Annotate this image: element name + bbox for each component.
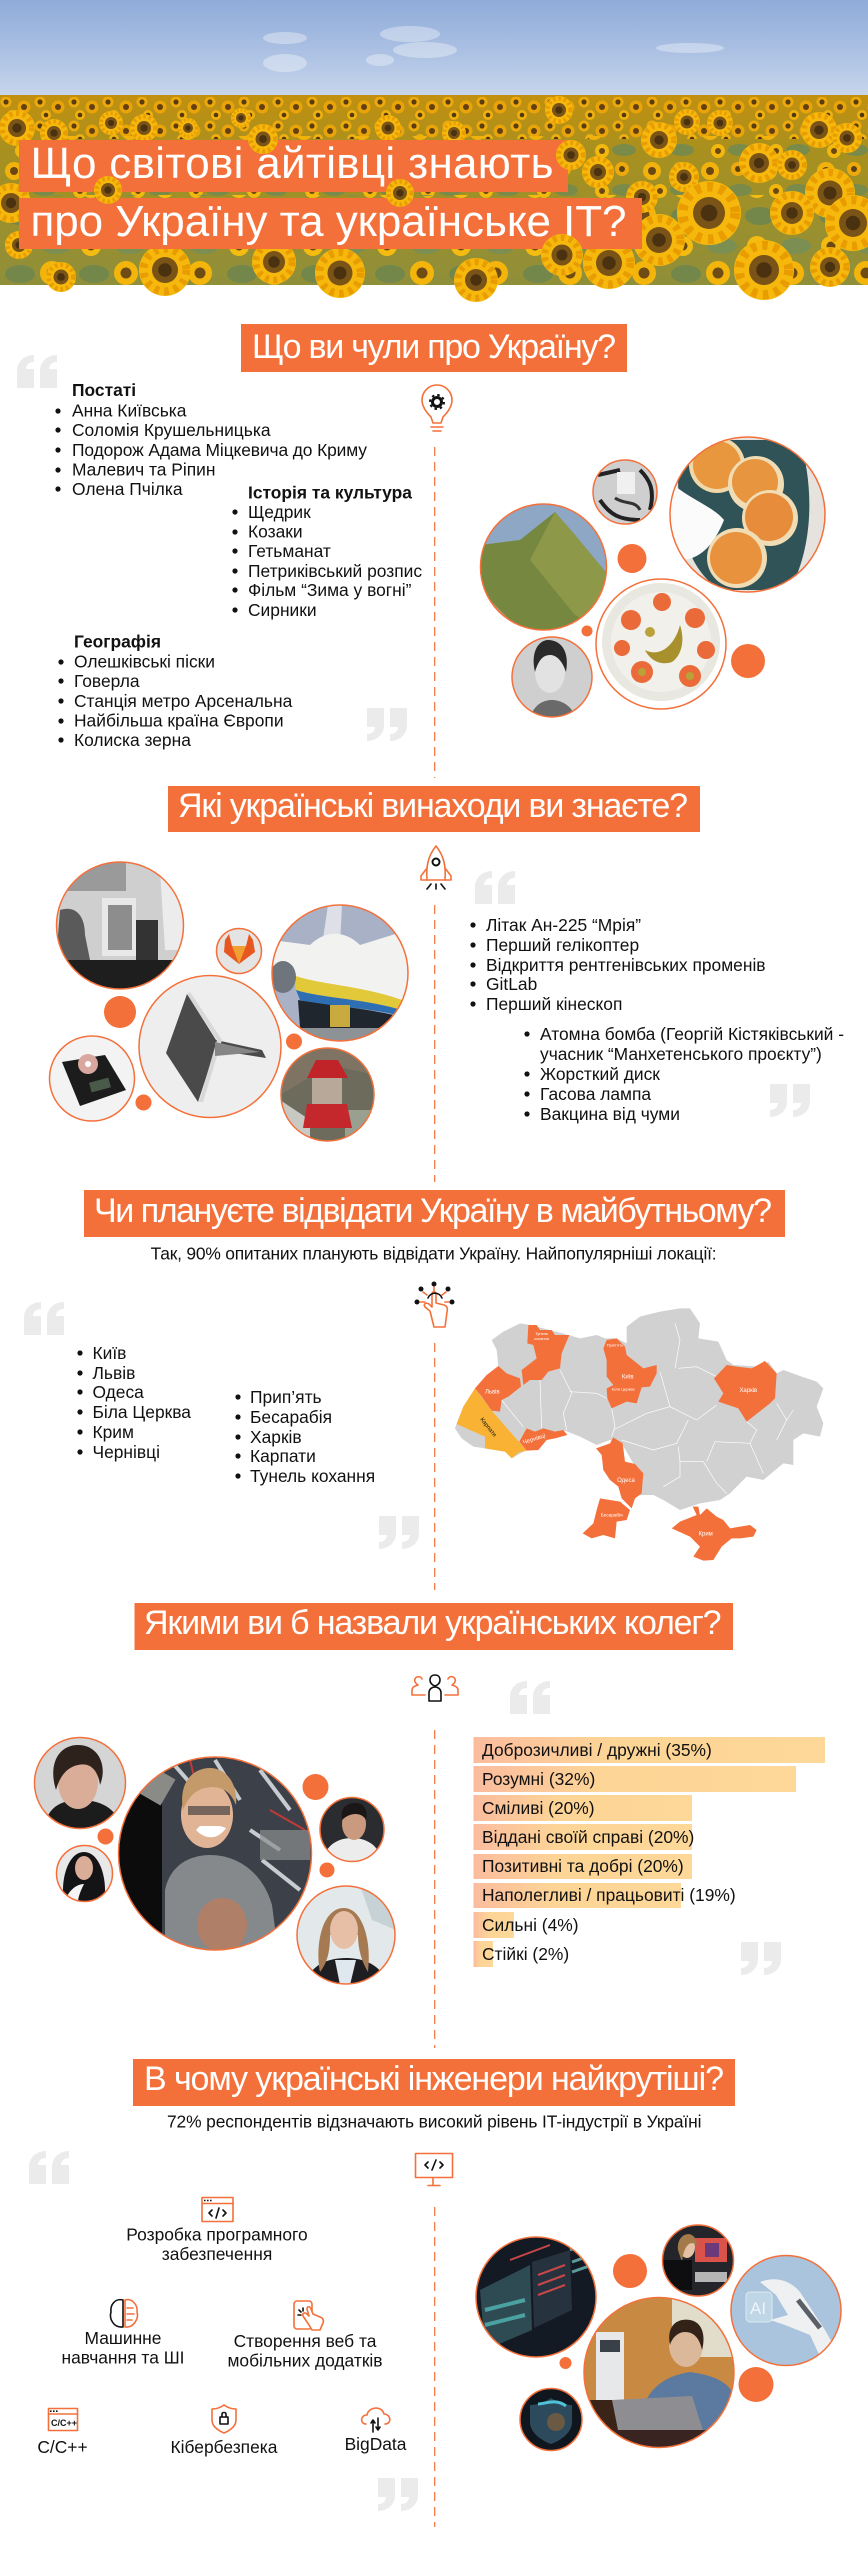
list: inventions 1: GitLab [486,974,537,994]
dot [302,1774,328,1800]
bar: resilient: Стійкі (2%) [482,1944,569,1964]
list: history and culture: Гетьманат [248,541,331,561]
dot [104,996,136,1028]
subheading: 72% респондентів відзначають високий рівень IT-індустрії в Україні [167,2112,702,2132]
photo: woman with dark hair [56,1845,114,1903]
photo: Petrykivka plate [596,579,726,709]
title [19,139,642,249]
opening quote mark [24,1302,64,1335]
skill: big data [345,2408,407,2454]
photo: CRT tube [139,976,281,1118]
heading: Які українські винаходи ви знаєте? [178,787,688,825]
list: history and culture [232,482,422,620]
list: history and culture: Історія та культура [248,482,412,502]
bar: friendly [474,1737,825,1763]
photo: digital shield [519,2388,583,2451]
map labels: Тунель [535,1331,548,1336]
bar: smart: Розумні (32%) [482,1769,595,1789]
list: people: Малевич та Ріпин [72,460,216,480]
list: locations 1: Крим [92,1422,134,1442]
region: Bessarabia [583,1498,630,1538]
divider line [434,447,436,778]
skill: software development [126,2198,308,2264]
skill: cybersecurity: Кібербезпека [171,2437,278,2457]
region: Kharkiv [714,1361,777,1422]
opening quote mark [510,1681,550,1714]
list: inventions 1: Відкриття рентгенівських променів [486,955,766,975]
map labels: Крим [699,1531,713,1537]
list: locations 2: Харків [250,1427,302,1447]
list: geography: Говерла [74,671,140,691]
section 4: Ukrainian colleagues [34,1603,825,2048]
photo: code on screens [475,2236,597,2358]
map labels [478,1331,757,1537]
photo: man in white hoodie [320,1797,384,1863]
map labels: Чернівці [522,1433,546,1446]
opening quote mark [17,355,57,388]
list: inventions 2 [524,1024,844,1124]
region: Carpathians [457,1388,527,1458]
opening quote mark [29,2151,69,2184]
list: geography: Олешківські піски [74,652,215,672]
sunflower field [0,95,868,302]
map labels: Біла Церква [612,1386,635,1391]
closing quote mark [770,1084,810,1117]
divider line [434,1343,436,1590]
photo: engineer with laptop [583,2297,736,2450]
list: inventions 1: Літак Ан-225 “Мрія” [486,915,641,935]
bar: strong: Сильні (4%) [482,1915,578,1935]
dot [320,1862,334,1878]
heading: Чи плануєте відвідати Україну в майбутньому? [94,1192,772,1230]
photo collage: inventions [50,861,410,1142]
list: people [55,380,367,499]
photo: gas lamp [280,1047,375,1142]
map labels: Харків [739,1388,757,1394]
dot [286,1034,302,1050]
list: people: Анна Київська [72,400,187,420]
list: people: Олена Пчілка [72,479,183,499]
photo collage: colleagues [34,1737,396,1985]
list: history and culture: Петриківський розпис [248,561,422,581]
icon: rocket [421,846,451,889]
region: Odesa [596,1437,643,1508]
map labels: кохання [534,1336,549,1341]
divider line [434,1730,436,2048]
dot [731,644,765,678]
subheading: Так, 90% опитаних планують відвідати Україну. Найпопулярніші локації: [151,1244,717,1264]
skill: big data: BigData [345,2434,407,2454]
map labels: Бесарабія [601,1513,623,1518]
list: inventions 2: Вакцина від чуми [540,1104,680,1124]
list: history and culture: Козаки [248,522,303,542]
closing quote mark [367,708,407,741]
skill: machine learning and AI [62,2300,184,2368]
list: inventions 2: Атомна бомба (Георгій Кістяківський - [540,1024,844,1044]
skill: C/C++: C/C++ [37,2437,88,2457]
section 2: Ukrainian inventions [50,786,844,1182]
heading: В чому українські інженери найкрутіші? [144,2060,724,2098]
photo collage: Ukraine [480,437,826,720]
dot [618,544,646,573]
list: inventions 2: Жорсткий диск [540,1064,660,1084]
dot [613,2254,647,2288]
skill: cybersecurity [171,2405,278,2457]
list: locations 2: Прип’ять [250,1387,322,1407]
list: people: Постаті [72,380,136,400]
dot [136,1094,152,1110]
bar: brave: Сміливі (20%) [482,1798,595,1818]
list: inventions 1 [470,915,766,1014]
skill: web and mobile apps [227,2301,383,2370]
photo: robot hand with AI [730,2255,843,2367]
photo: syrnyky plate [668,437,826,593]
title: про Україну та українське IT? [30,197,626,246]
section 1: what have you heard about Ukraine [17,324,826,778]
map labels: Карпати [478,1417,497,1438]
list: locations 1: Одеса [92,1382,144,1402]
closing quote mark [378,2478,418,2511]
photo: Olena Pchilka portrait [510,635,595,720]
heading: Що ви чули про Україну? [252,328,616,366]
list: people: Соломія Крушельницька [72,420,271,440]
icon: people [412,1675,458,1701]
list: locations 2: Бесарабія [250,1407,332,1427]
list: history and culture: Щедрик [248,502,311,522]
icon: monitor with code [416,2154,452,2186]
region: Rivne [522,1325,569,1385]
section 5: where Ukrainian engineers excel [29,2059,843,2527]
photo: Hoverla mountain [480,503,608,632]
skill: web and mobile apps: Створення веб та [234,2331,377,2351]
dot [738,2367,774,2402]
list: locations 2 [235,1387,375,1486]
dot [582,626,592,636]
sunflowers overlapping title [94,124,586,276]
list: locations 2: Тунель кохання [250,1466,375,1486]
bar: dedicated: Віддані своїй справі (20%) [482,1827,694,1847]
photo: engraving [592,459,658,525]
dot [98,1828,114,1844]
heading: Якими ви б назвали українських колег? [144,1604,722,1642]
list: locations 1 [77,1343,191,1462]
list: people: Подорож Адама Міцкевича до Криму [72,440,367,460]
hero banner [0,0,868,302]
opening quote mark [475,871,515,904]
region: Kyiv [603,1338,657,1408]
region: Crimea [672,1507,757,1561]
closing quote mark [379,1516,419,1549]
skill: software development: забезпечення [162,2244,272,2264]
bar: smart [474,1766,796,1792]
list: geography: Станція метро Арсенальна [74,691,293,711]
photo: engineer in server room [118,1756,312,1952]
list: geography: Найбільша країна Європи [74,710,284,730]
skill: machine learning and AI: навчання та ШІ [62,2348,184,2368]
divider line [434,905,436,1182]
title: Що світові айтівці знають [30,139,554,188]
list: history and culture: Фільм “Зима у вогні” [248,580,412,600]
skill: C/C++: C/C++ [51,2418,77,2428]
bar: positive: Позитивні та добрі (20%) [482,1856,684,1876]
list: history and culture: Сирники [248,600,317,620]
list: inventions 2: учасник “Манхетенського проєкту”) [540,1044,822,1064]
region: Lviv [475,1366,521,1412]
list: locations 1: Біла Церква [92,1402,191,1422]
bar chart: traits [474,1737,825,1967]
map of Ukraine [455,1308,823,1561]
list: geography [58,632,293,750]
list: inventions 1: Перший гелікоптер [486,935,639,955]
icon: tap with nodes [414,1282,454,1327]
map labels: Одеса [617,1478,635,1484]
photo collage: engineering [475,2224,843,2451]
photo: An-225 Mriya [270,904,410,1044]
list: inventions 2: Гасова лампа [540,1084,651,1104]
divider line [434,2207,436,2527]
map labels: Прип’ять [607,1343,623,1348]
region: Chernivtsi [519,1428,567,1451]
list: geography: Географія [74,632,161,652]
photo: robot hand with AI: AI [750,2299,766,2318]
dot [560,2357,572,2369]
photo: woman in blazer [296,1885,396,1985]
skill: C/C++ [37,2408,88,2457]
closing quote mark [741,1942,781,1975]
photo: hard disk [50,1036,134,1121]
list: geography: Колиска зерна [74,730,191,750]
list: locations 1: Київ [92,1343,126,1363]
clouds [263,26,724,72]
list: locations 1: Чернівці [92,1442,160,1462]
skill: machine learning and AI: Машинне [85,2328,161,2348]
icon: light bulb with gear [422,385,452,431]
photo: GitLab logo [216,928,262,974]
list: locations 1: Львів [92,1363,135,1383]
bar: persistent: Наполегливі / працьовиті (19%) [482,1885,736,1905]
photo: young man [34,1737,126,1830]
list: locations 2: Карпати [250,1446,316,1466]
section 3: plans to visit Ukraine [24,1190,823,1590]
photo: woman at computer [662,2224,735,2297]
map labels: Львів [485,1390,500,1396]
photo: x-ray [56,861,184,990]
bar: friendly: Доброзичливі / дружні (35%) [482,1740,712,1760]
bar: brave [474,1795,692,1821]
sky [0,0,868,125]
map labels: Київ [622,1374,634,1380]
list: inventions 1: Перший кінескоп [486,994,622,1014]
skill: software development: Розробка програмного [126,2224,308,2244]
skill: web and mobile apps: мобільних додатків [227,2350,383,2370]
